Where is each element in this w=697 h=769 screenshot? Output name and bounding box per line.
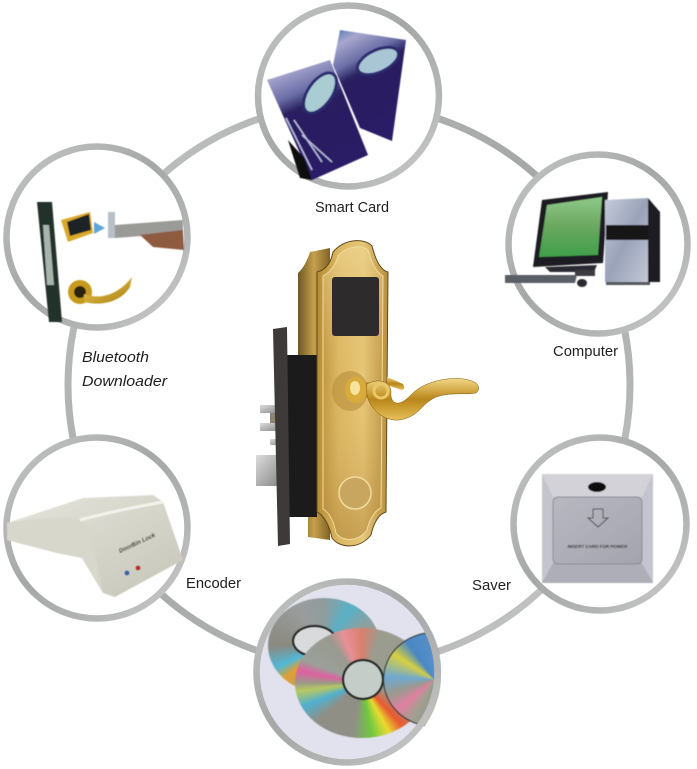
label: encoder: Encoder <box>186 575 241 592</box>
label: bluetooth downloader <box>82 349 168 390</box>
label: smart card: Smart Card <box>315 199 389 216</box>
illustration: door lock <box>256 241 479 546</box>
label: bluetooth downloader: Bluetooth <box>82 349 149 366</box>
icon: energy saver switch: INSERT CARD FOR POWER <box>568 544 628 549</box>
lever handle <box>332 371 479 420</box>
icon: energy saver switch <box>542 474 653 583</box>
icon: card encoder: DoorBin Lock <box>118 532 157 555</box>
panel: smart card <box>258 6 439 186</box>
card reader window <box>332 277 379 336</box>
label: saver: Saver <box>472 577 511 594</box>
label: bluetooth downloader: Downloader <box>82 373 168 390</box>
panel: saver <box>514 438 686 610</box>
mortise case <box>287 355 317 517</box>
key cover <box>339 477 371 509</box>
icon: card encoder <box>7 495 183 597</box>
escutcheon plate <box>317 241 388 546</box>
icon: smart cards <box>267 30 406 180</box>
mortise faceplate <box>273 327 290 546</box>
large connecting ring <box>68 104 630 666</box>
panel: discs <box>255 580 441 766</box>
label: computer: Computer <box>553 343 618 360</box>
icon: lock strip, reader, hand and handle <box>37 202 184 322</box>
panel: computer <box>505 154 688 334</box>
panel: encoder <box>6 438 188 618</box>
bolts <box>256 405 282 486</box>
panel: bluetooth downloader <box>6 146 188 328</box>
icon: desktop computer <box>505 192 660 287</box>
lock body side <box>298 248 330 540</box>
icon: compact discs <box>255 580 441 766</box>
